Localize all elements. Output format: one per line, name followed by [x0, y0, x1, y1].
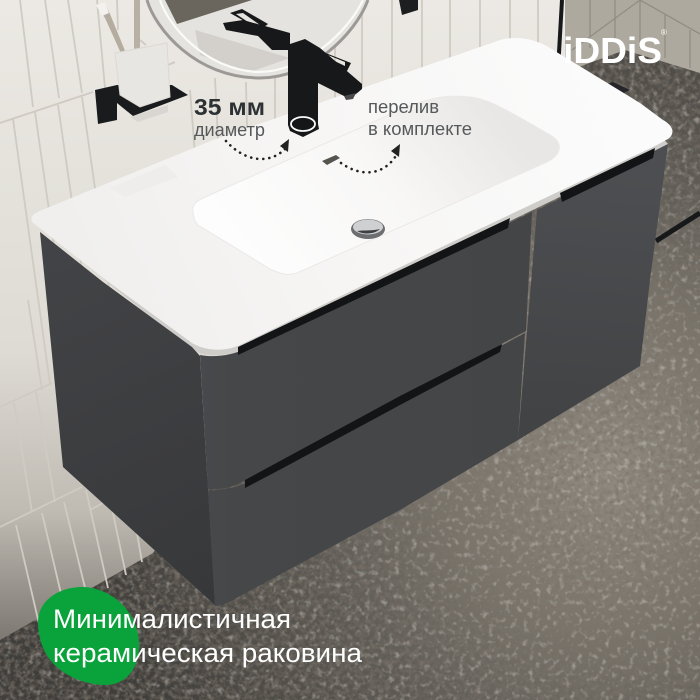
drawer and door handles [238, 148, 655, 488]
round mirror [140, 0, 370, 80]
brand logo: ® [661, 28, 667, 37]
headline [53, 604, 363, 668]
faucet reflection in mirror [223, 9, 290, 50]
overflow opening [322, 155, 340, 165]
drain [351, 219, 385, 239]
callout: overflow included: в комплекте [368, 119, 472, 139]
background: right wall tiles [565, 0, 700, 73]
brand logo: iDDiS [563, 30, 662, 71]
basin bowl [193, 96, 559, 274]
background: tiled wall, left and top [0, 0, 565, 640]
toothbrush cup and holder [95, 0, 188, 124]
soap dish print on sink [110, 165, 178, 197]
callout: 35 mm diameter: диаметр [194, 120, 265, 140]
faucet [287, 39, 362, 137]
ceramic sink front lip shadow [38, 135, 668, 355]
callout: 35 mm diameter [194, 94, 265, 140]
headline: Минималистичная [53, 604, 291, 634]
wall bracket [399, 0, 418, 15]
green blob [38, 587, 139, 685]
callout: overflow included [368, 97, 472, 139]
callout: overflow included: перелив [368, 97, 439, 117]
cabinet upper drawer [200, 212, 532, 489]
callout: 35 mm diameter: 35 мм [194, 94, 265, 120]
dotted arrow to faucet [226, 139, 289, 159]
callout ring: 35 mm aerator [291, 117, 315, 131]
cabinet side panel [40, 232, 215, 605]
black shower frame [558, 0, 700, 241]
cabinet door [518, 144, 668, 440]
dotted arrow from overflow [341, 144, 400, 172]
cabinet lower drawer [208, 333, 525, 606]
headline: керамическая раковина [53, 638, 363, 668]
ceramic sink top [31, 38, 672, 350]
